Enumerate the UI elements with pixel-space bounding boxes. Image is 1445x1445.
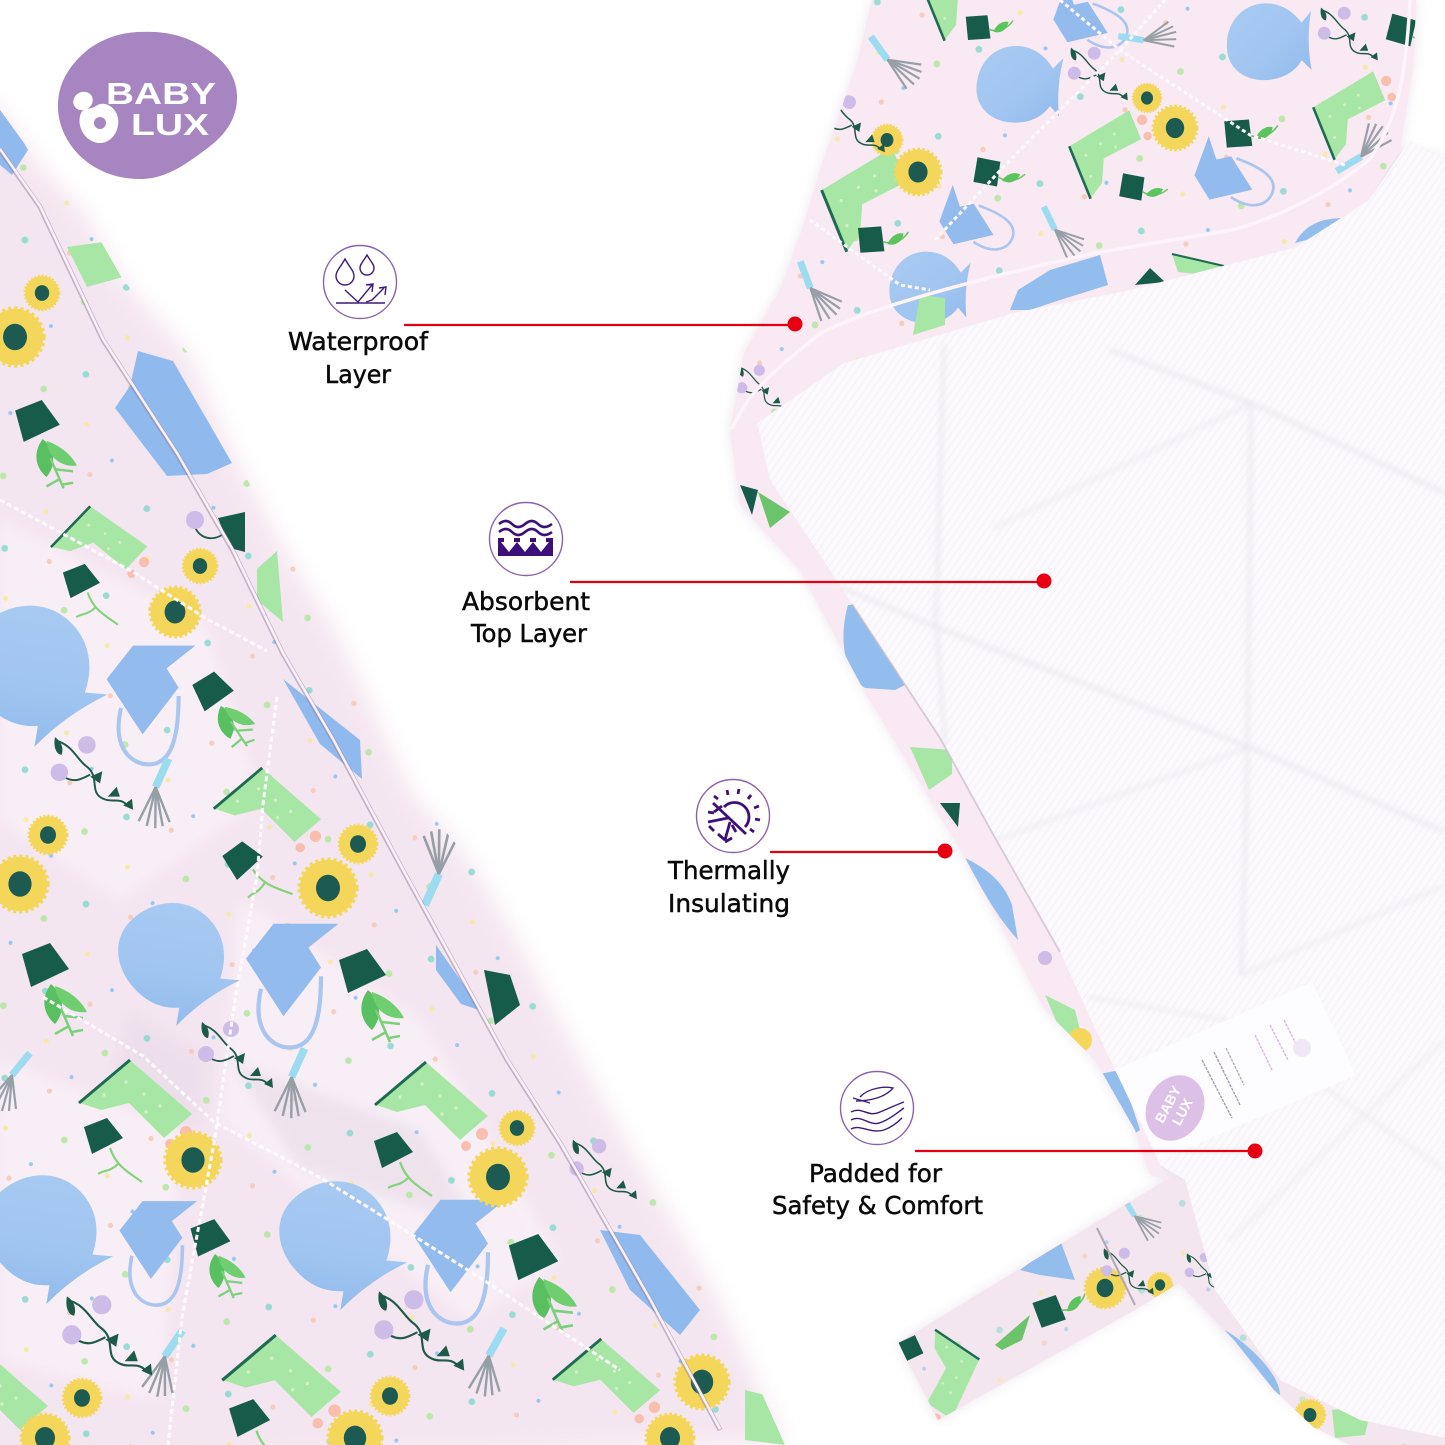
tag logo <box>1134 1065 1216 1151</box>
fabric base <box>0 90 785 1445</box>
printed vines <box>51 511 637 1376</box>
label <box>772 1159 983 1220</box>
soft edge shadow <box>730 0 1445 1445</box>
label: Layer <box>325 360 392 389</box>
marker dot <box>1248 1144 1262 1158</box>
label <box>462 587 590 648</box>
logo mark <box>70 88 118 143</box>
marker dot <box>788 316 802 332</box>
panel: changing pad with printed and terry sides on the right <box>720 0 1445 1445</box>
soft folds <box>0 520 560 1400</box>
callout: Padded for Safety & Comfort <box>772 1072 1262 1220</box>
quilting on terry side <box>840 345 1445 1240</box>
logo text: LUX <box>131 107 209 142</box>
printed boots <box>0 242 785 1445</box>
icon: absorbent layers <box>490 502 562 576</box>
connector line <box>770 851 945 853</box>
label: Absorbent <box>462 587 590 616</box>
connector line <box>404 324 795 326</box>
piped edge <box>0 150 720 1430</box>
printed top border <box>720 0 1443 440</box>
label: Padded for <box>809 1159 943 1188</box>
printed vases <box>0 100 700 1335</box>
terry towel side <box>757 140 1445 1438</box>
connector line <box>570 581 1044 583</box>
tag logo: BABY <box>1152 1082 1185 1126</box>
panel: close-up of printed waterproof fabric on the left <box>0 0 800 1445</box>
icon: feather over padding <box>840 1072 914 1144</box>
care tag <box>1115 982 1356 1160</box>
logo text <box>106 76 216 142</box>
printed side border <box>730 423 1168 1178</box>
connector line <box>915 1150 1255 1152</box>
callout: Waterproof Layer <box>288 246 802 389</box>
callout: Absorbent Top Layer <box>462 502 1052 648</box>
icon: water drops and deflection arrows <box>324 246 396 318</box>
logo: Baby Lux <box>58 32 237 179</box>
printed watering cans <box>107 646 505 1324</box>
marker dot <box>1036 574 1052 588</box>
printed plant pots <box>15 400 577 1445</box>
label: Thermally <box>667 856 790 885</box>
label: Top Layer <box>470 619 588 648</box>
quilt stitching <box>0 500 620 1445</box>
label <box>667 856 790 918</box>
callout: Thermally Insulating <box>667 780 952 918</box>
label: Insulating <box>668 889 790 918</box>
label: Waterproof <box>288 327 429 356</box>
quilt stitching <box>935 0 1165 240</box>
printed rakes <box>0 759 515 1399</box>
label <box>288 327 429 389</box>
label: Safety & Comfort <box>772 1191 983 1220</box>
marker dot <box>938 844 952 858</box>
logo text: BABY <box>106 76 216 111</box>
icon: sun and snowflake <box>696 780 770 852</box>
tag logo: LUX <box>1168 1095 1196 1128</box>
printed sunflowers <box>0 276 728 1445</box>
bottom hanging strap and border <box>880 1170 1445 1445</box>
